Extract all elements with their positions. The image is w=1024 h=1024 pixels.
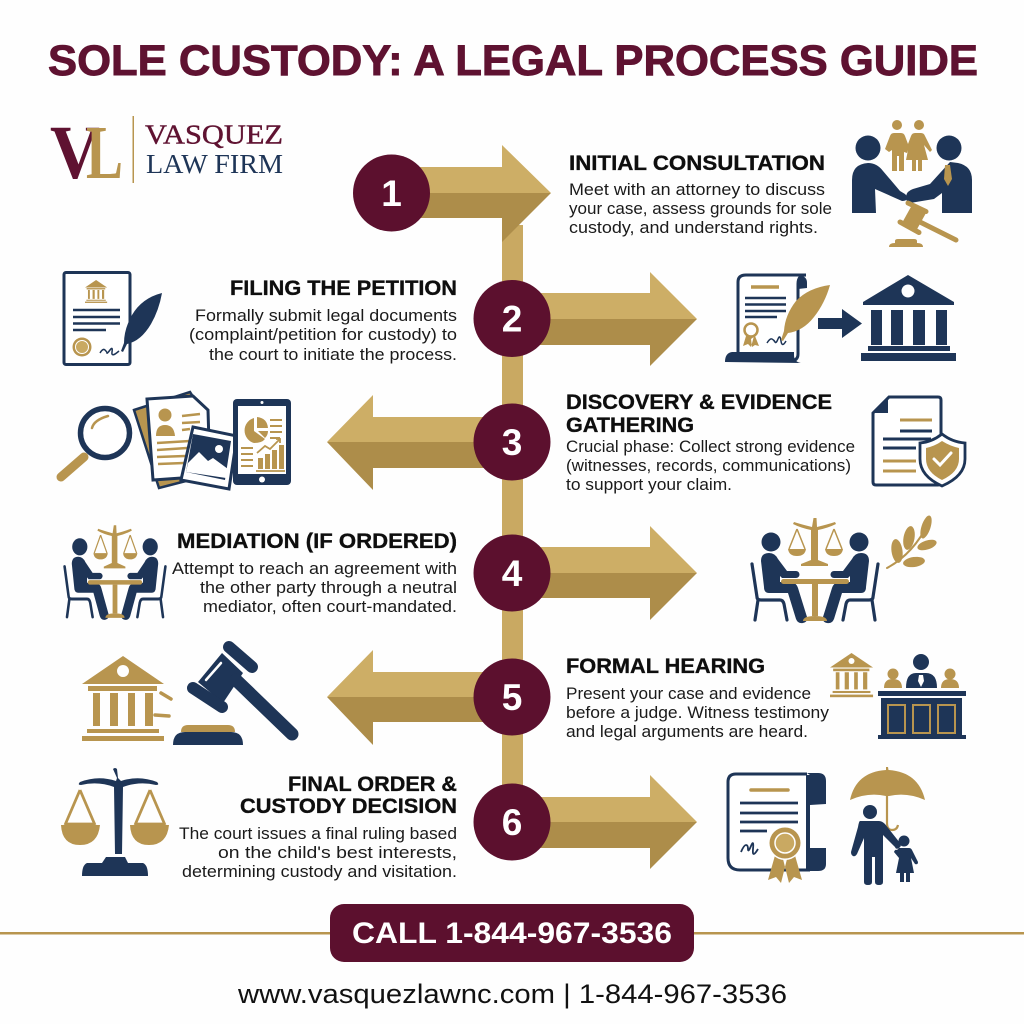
step 5 text: formal hearing: before a judge. Witness testimony [566, 703, 830, 722]
step 5 text: formal hearing: and legal arguments are heard. [566, 722, 808, 741]
step 1 number badge: 1 [381, 173, 402, 214]
central process timeline with arrows [327, 145, 697, 869]
step 4 number badge: 4 [502, 553, 523, 594]
icon: courthouse and gavel strike [82, 647, 292, 745]
step 2 number badge [474, 280, 550, 357]
logo: Vasquez Law Firm: L [86, 111, 123, 195]
step 5 text: formal hearing: FORMAL HEARING [566, 654, 765, 678]
step 2 text: filing the petition: Formally submit legal documents [195, 306, 457, 325]
step 3 number badge [474, 404, 550, 480]
step 6 number badge: 6 [502, 802, 522, 843]
step 4 text: mediation: the other party through a neutral [200, 578, 457, 597]
step 2 text: filing the petition [189, 276, 457, 364]
step 3 text: discovery and evidence gathering: GATHERING [566, 413, 694, 437]
step 1 text: initial consultation: your case, assess grounds for sole [569, 199, 832, 218]
step 5 number badge [474, 658, 550, 736]
icon: handshake, family and gavel [852, 120, 972, 247]
step 6 text: final order and custody decision [179, 772, 457, 881]
step 6 text: final order and custody decision: CUSTODY DECISION [240, 794, 457, 818]
step 3 number badge: 3 [502, 422, 522, 463]
icon: scales of justice [61, 768, 169, 876]
step 1 text: initial consultation: INITIAL CONSULTATION [569, 151, 825, 175]
step 1 text: initial consultation [569, 151, 832, 237]
step 3 text: discovery and evidence gathering: DISCOVERY & EVIDENCE [566, 390, 832, 414]
call to action button [330, 904, 694, 962]
step 3 text: discovery and evidence gathering: (witnesses, records, communications) [566, 456, 851, 475]
step 2 text: filing the petition: FILING THE PETITION [230, 276, 457, 300]
step 6 text: final order and custody decision: determining custody and visitation. [182, 862, 457, 881]
call to action button: CALL 1-844-967-3536 [352, 917, 672, 950]
footer rule [0, 932, 1024, 934]
step 1 text: initial consultation: custody, and understand rights. [569, 218, 818, 237]
icon: mediation table, left [65, 525, 165, 620]
icon: mediation table with olive branch [752, 514, 938, 623]
step 1 number badge [353, 154, 430, 232]
step 2 text: filing the petition: the court to initiate the process. [209, 345, 457, 364]
step 6 text: final order and custody decision: on the child's best interests, [218, 843, 457, 862]
icon: scroll, quill, arrow and courthouse [725, 275, 956, 363]
icon: courthouse and judge bench [830, 653, 966, 739]
icon: petition document with quill [64, 272, 162, 364]
step 3 text: discovery and evidence gathering [566, 390, 855, 494]
icon: umbrella protecting parent and child [850, 767, 925, 885]
step 2 number badge: 2 [502, 298, 522, 340]
step 5 text: formal hearing [566, 654, 830, 741]
icon: document with shield check [873, 397, 966, 487]
step 5 number badge: 5 [502, 677, 522, 718]
step 2 text: filing the petition: (complaint/petition for custody) to [189, 325, 457, 344]
step 6 text: final order and custody decision: FINAL ORDER & [288, 772, 457, 796]
logo: Vasquez Law Firm: V [50, 111, 100, 195]
logo: Vasquez Law Firm: VASQUEZ [145, 120, 283, 150]
step 3 text: discovery and evidence gathering: Crucial phase: Collect strong evidence [566, 437, 855, 456]
step 5 text: formal hearing: Present your case and evidence [566, 684, 811, 703]
footer website and phone: www.vasquezlawnc.com | 1-844-967-3536 [237, 979, 787, 1009]
icon: magnifier, photos and data tablet [61, 392, 291, 489]
step 4 text: mediation: Attempt to reach an agreement with [172, 559, 457, 578]
icon: certificate with seal [728, 773, 826, 883]
logo: Vasquez Law Firm [50, 111, 283, 195]
step 4 number badge [474, 534, 550, 612]
logo: Vasquez Law Firm: LAW FIRM [146, 149, 283, 179]
title: SOLE CUSTODY: A LEGAL PROCESS GUIDE [48, 37, 978, 85]
step 4 text: mediation: MEDIATION (IF ORDERED) [177, 529, 457, 553]
step 3 text: discovery and evidence gathering: to support your claim. [566, 475, 732, 494]
step 4 text: mediation [172, 529, 457, 616]
step 6 number badge [474, 784, 550, 860]
step 1 text: initial consultation: Meet with an attorney to discuss [569, 180, 825, 199]
step 4 text: mediation: mediator, often court-mandated. [203, 597, 457, 616]
step 6 text: final order and custody decision: The court issues a final ruling based [179, 824, 457, 843]
